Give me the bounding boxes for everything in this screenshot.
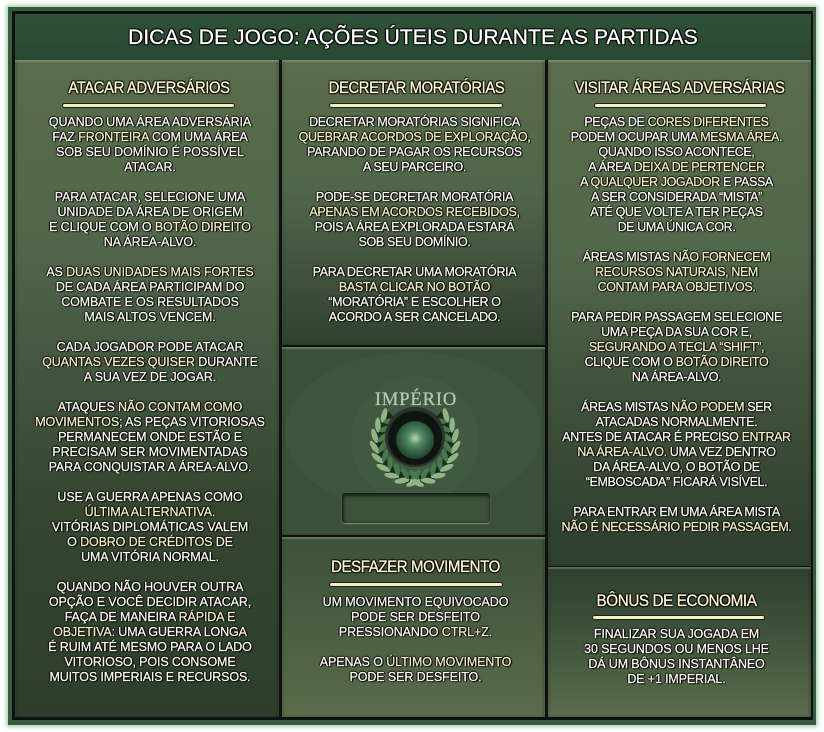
body text: atacar: OBJETIVA: UMA GUERRA LONGA [53, 625, 247, 639]
body text: atacar: VITORIOSO, POIS CONSOME [64, 655, 236, 669]
body text: atacar: MUITOS IMPERIAIS E RECURSOS. [49, 670, 251, 684]
panel: atacar adversários [15, 60, 279, 717]
laurel wreath [366, 405, 464, 491]
heading: atacar adversários: ATACAR ADVERSÁRIOS [68, 79, 230, 97]
body text: atacar: A SUA VEZ DE JOGAR. [84, 370, 216, 384]
panel: bônus de economia [548, 567, 811, 717]
body text: atacar: COMBATE E OS RESULTADOS [61, 295, 239, 309]
body text: visitar: ATÉ QUE VOLTE A TER PEÇAS [590, 205, 763, 219]
body text: visitar: PARA ENTRAR EM UMA ÁREA MISTA [573, 505, 780, 519]
body text: visitar: RECURSOS NATURAIS, NEM [595, 265, 758, 279]
body text: atacar: QUANDO UMA ÁREA ADVERSÁRIA [49, 115, 251, 129]
body text: decretar: SOB SEU DOMÍNIO. [358, 235, 471, 249]
body text: visitar: NÃO É NECESSÁRIO PEDIR PASSAGEM. [561, 520, 792, 534]
body text: atacar: VITÓRIAS DIPLOMÁTICAS VALEM [52, 520, 248, 534]
panel: visitar áreas adversárias [548, 60, 811, 566]
heading: desfazer movimento: DESFAZER MOVIMENTO [331, 558, 500, 576]
body text: visitar: PODEM OCUPAR UMA MESMA ÁREA. [571, 130, 782, 144]
panel: decretar moratórias [282, 60, 545, 345]
body text: atacar: E CLIQUE COM O BOTÃO DIREITO [49, 220, 251, 234]
body text: desfazer: PODE SER DESFEITO. [349, 670, 482, 684]
body text: atacar: NA ÁREA-ALVO. [104, 235, 196, 249]
body text: visitar: NA ÁREA-ALVO. UMA VEZ DENTRO [577, 445, 776, 459]
body text: decretar: DECRETAR MORATÓRIAS SIGNIFICA [309, 115, 520, 129]
body text: visitar: NA ÁREA-ALVO. [632, 370, 721, 384]
body text: visitar: “EMBOSCADA” FICARÁ VISÍVEL. [586, 475, 767, 489]
body text: visitar: ÁREAS MISTAS NÃO PODEM SER [581, 400, 772, 414]
body text: desfazer: PODE SER DESFEITO [351, 610, 480, 624]
body text: atacar: PARA CONQUISTAR A ÁREA-ALVO. [49, 460, 251, 474]
body text: visitar: PEÇAS DE CORES DIFERENTES [584, 115, 769, 129]
body text: desfazer [318, 595, 512, 684]
body text: atacar: SOB SEU DOMÍNIO É POSSÍVEL [56, 145, 244, 159]
body text: visitar: CLIQUE COM O BOTÃO DIREITO [585, 355, 768, 369]
body text: atacar: É RUIM ATÉ MESMO PARA O LADO [48, 640, 252, 654]
body text: atacar: UNIDADE DA ÁREA DE ORIGEM [58, 205, 242, 219]
body text: visitar: ÁREAS MISTAS NÃO FORNECEM [583, 250, 770, 264]
body text: decretar: “MORATÓRIA” E ESCOLHER O [328, 295, 501, 309]
body text: visitar: A QUALQUER JOGADOR E PASSA [580, 175, 773, 189]
body text: visitar: QUANDO ISSO ACONTECE, [599, 145, 754, 159]
body text: bônus: DE +1 IMPERIAL. [627, 672, 726, 686]
body text: atacar: CADA JOGADOR PODE ATACAR [57, 340, 243, 354]
body text: atacar: MOVIMENTOS; AS PEÇAS VITORIOSAS [35, 415, 265, 429]
body text: bônus [583, 627, 770, 686]
body text: atacar: AS DUAS UNIDADES MAIS FORTES [46, 265, 254, 279]
body text: atacar: O DOBRO DE CRÉDITOS DE [67, 535, 233, 549]
heading: decretar moratórias: DECRETAR MORATÓRIAS [329, 79, 504, 97]
body text: atacar: ATACAR. [124, 160, 176, 174]
body text: visitar: SEGURANDO A TECLA “SHIFT”, [589, 340, 764, 354]
body text: decretar: BASTA CLICAR NO BOTÃO [339, 280, 490, 294]
body text: visitar: CONTAM PARA OBJETIVOS. [598, 280, 755, 294]
body text: atacar: PARA ATACAR, SELECIONE UMA [55, 190, 245, 204]
body text: atacar: QUANTAS VEZES QUISER DURANTE [42, 355, 258, 369]
body text: decretar [298, 113, 532, 324]
body text: visitar: A SER CONSIDERADA “MISTA” [591, 190, 762, 204]
body text: bônus: FINALIZAR SUA JOGADA EM [594, 627, 759, 641]
body text: visitar: ANTES DE ATACAR É PRECISO ENTRAR [562, 430, 791, 444]
body text: decretar: PODE-SE DECRETAR MORATÓRIA [316, 190, 513, 204]
panel: desfazer movimento [282, 537, 545, 717]
body text: desfazer: PRESSIONANDO CTRL+Z. [339, 625, 492, 639]
body text: desfazer: APENAS O ÚLTIMO MOVIMENTO [320, 655, 511, 669]
heading: bônus de economia: BÔNUS DE ECONOMIA [597, 592, 756, 610]
body text: atacar: PERMANECEM ONDE ESTÃO E [58, 430, 242, 444]
empty name box [342, 493, 490, 523]
heading: visitar áreas adversárias: VISITAR ÁREAS ADVERSÁRIAS [575, 79, 784, 97]
body text: atacar: ATAQUES NÃO CONTAM COMO [58, 400, 242, 414]
body text: decretar: PARA DECRETAR UMA MORATÓRIA [313, 265, 516, 279]
title bar: DICAS DE JOGO: AÇÕES ÚTEIS DURANTE AS PARTIDAS [128, 26, 698, 49]
body text: visitar: PARA PEDIR PASSAGEM SELECIONE [571, 310, 782, 324]
panel: império logo [282, 347, 545, 535]
globe [385, 407, 445, 467]
body text: desfazer: UM MOVIMENTO EQUIVOCADO [323, 595, 508, 609]
body text: decretar: ACORDO A SER CANCELADO. [329, 310, 500, 324]
body text: atacar: OPÇÃO E VOCÊ DECIDIR ATACAR, [49, 595, 251, 609]
body text: atacar: QUANDO NÃO HOUVER OUTRA [57, 580, 243, 594]
body text: atacar: FAZ FRONTEIRA COM UMA ÁREA [52, 130, 248, 144]
body text: decretar: APENAS EM ACORDOS RECEBIDOS, [309, 205, 520, 219]
body text: atacar: ÚLTIMA ALTERNATIVA. [85, 505, 215, 519]
body text: visitar: DA ÁREA-ALVO, O BOTÃO DE [593, 460, 760, 474]
body text: visitar: A ÁREA DEIXA DE PERTENCER [588, 160, 765, 174]
body text: visitar: UMA PEÇA DA SUA COR E, [601, 325, 752, 339]
body text: decretar: QUEBRAR ACORDOS DE EXPLORAÇÃO, [299, 130, 530, 144]
body text: visitar [561, 115, 792, 534]
body text: decretar: A SEU PARCEIRO. [363, 160, 466, 174]
emblem: império globe and laurel [352, 376, 478, 493]
body text: decretar: PARANDO DE PAGAR OS RECURSOS [307, 145, 522, 159]
body text: bônus: 30 SEGUNDOS OU MENOS LHE [584, 642, 769, 656]
body text: atacar: USE A GUERRA APENAS COMO [57, 490, 243, 504]
body text: atacar: FAÇA DE MANEIRA RÁPIDA E [65, 610, 235, 624]
body text: atacar: PRECISAM SER MOVIMENTADAS [52, 445, 248, 459]
title bar [15, 14, 811, 60]
logo text: IMPÉRIO [375, 388, 457, 410]
body text: atacar: MAIS ALTOS VENCEM. [84, 310, 216, 324]
body text: atacar: DE CADA ÁREA PARTICIPAM DO [56, 280, 244, 294]
body text: atacar: UMA VITÓRIA NORMAL. [81, 550, 219, 564]
body text: visitar: DE UMA ÚNICA COR. [618, 220, 735, 234]
body text: atacar [34, 113, 266, 684]
body text: decretar: POIS A ÁREA EXPLORADA ESTARÁ [315, 220, 514, 234]
body text: visitar: ATACADAS NORMALMENTE. [596, 415, 757, 429]
body text: bônus: DÁ UM BÔNUS INSTANTÂNEO [588, 657, 765, 671]
